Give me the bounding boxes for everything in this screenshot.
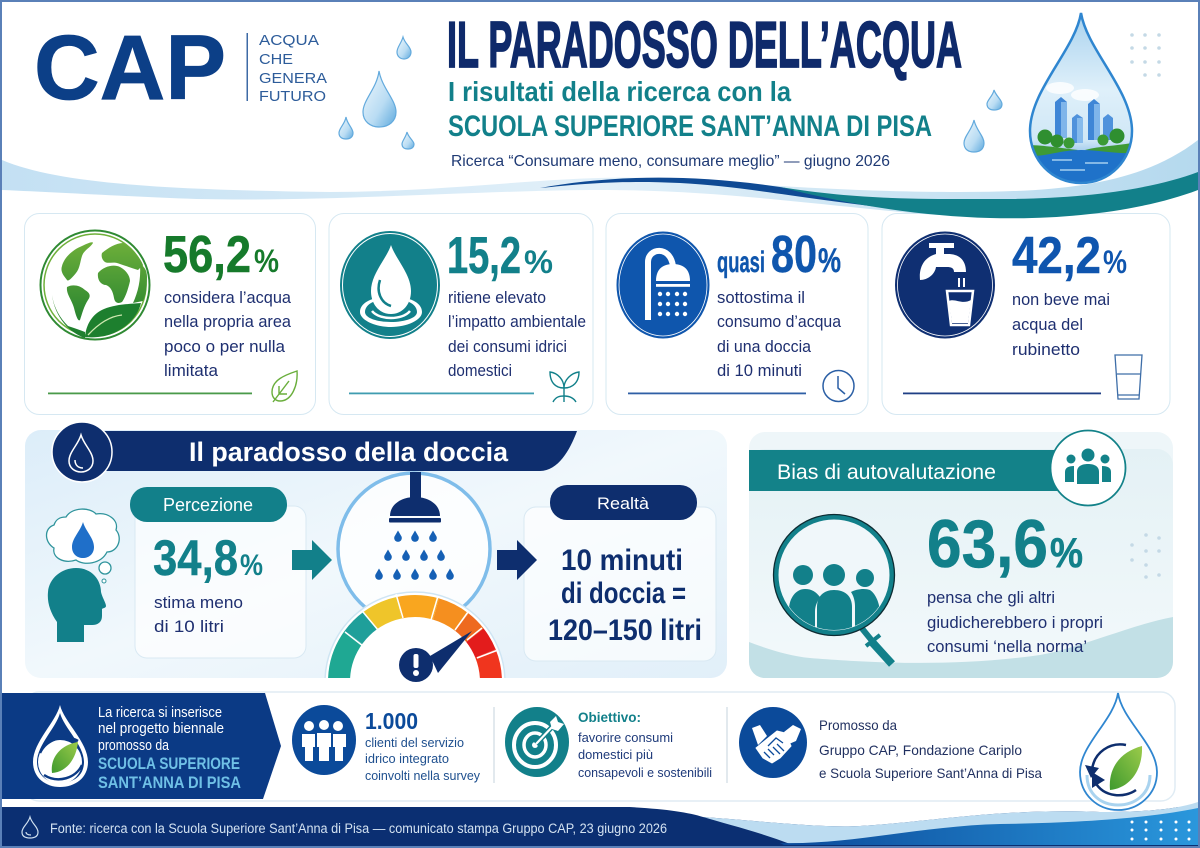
logo: CAP: GENERA bbox=[259, 71, 327, 87]
block: 1.000 clients: idrico integrato bbox=[365, 751, 449, 766]
decorative dots bbox=[1130, 33, 1161, 579]
icon: drop on ripple bbox=[340, 231, 440, 339]
project banner: nel progetto biennale bbox=[98, 721, 224, 737]
stat text: acqua del bbox=[1012, 316, 1083, 334]
stat value: 80 bbox=[771, 226, 817, 284]
icon: big drop with city bbox=[1030, 13, 1132, 185]
block: 1.000 clients bbox=[365, 708, 480, 783]
reality card: Realtà bbox=[597, 494, 650, 513]
block: 1.000 clients: clienti del servizio bbox=[365, 735, 464, 750]
project banner: SANT’ANNA DI PISA bbox=[98, 773, 241, 792]
logo: CAP: ACQUA bbox=[259, 33, 319, 49]
logo: CAP: CHE bbox=[259, 52, 293, 68]
research line: Ricerca “Consumare meno, consumare meglio” — giugno 2026 bbox=[451, 153, 890, 170]
header waves bbox=[2, 140, 1198, 218]
stat value: % bbox=[254, 243, 279, 279]
stat text: consumo d’acqua bbox=[717, 313, 842, 331]
panel: stat 42,2% bbox=[882, 214, 1170, 414]
perception card: % bbox=[240, 549, 263, 582]
icon: drop with leaf bbox=[33, 705, 88, 787]
perception card: Percezione bbox=[163, 495, 253, 515]
icon: target bbox=[505, 707, 569, 777]
stat text: domestici bbox=[448, 362, 512, 380]
icon: handshake bbox=[739, 707, 807, 778]
icon: magnifying glass with people bbox=[774, 514, 894, 664]
icon: tap and glass bbox=[895, 232, 995, 338]
perception card: stima meno bbox=[154, 594, 243, 612]
project strip bbox=[2, 692, 1175, 801]
arrow: shower to reality bbox=[497, 540, 537, 580]
panel: stat 56,2% bbox=[24, 214, 316, 414]
stat value: 63,6 bbox=[927, 506, 1048, 582]
block: obiettivo: favorire consumi bbox=[578, 731, 673, 745]
stat text: consumi ‘nella norma’ bbox=[927, 637, 1087, 656]
stat value: quasi bbox=[717, 246, 765, 279]
block: obiettivo: domestici più bbox=[578, 748, 653, 762]
stat value bbox=[717, 226, 841, 284]
block: 1.000 clients: coinvolti nella survey bbox=[365, 768, 480, 783]
icon: small water drops bbox=[339, 37, 1002, 152]
stat text bbox=[927, 588, 1103, 656]
reality card: 10 minuti bbox=[561, 544, 683, 577]
reality card bbox=[524, 485, 716, 661]
source text: Fonte: ricerca con la Scuola Superiore Sant’Anna di Pisa — comunicato stampa Gruppo CAP, 23 giugno 2026 bbox=[50, 821, 667, 836]
block: promosso da: Promosso da bbox=[819, 717, 897, 733]
arrow: perception to shower bbox=[292, 540, 332, 580]
perception card: 34,8 bbox=[153, 530, 238, 586]
logo: CAP: FUTURO bbox=[259, 89, 326, 105]
stat text bbox=[1012, 291, 1110, 359]
stat text bbox=[717, 289, 842, 380]
block: obiettivo: Obiettivo: bbox=[578, 710, 641, 725]
project banner: promosso da bbox=[98, 738, 170, 754]
block: promosso da bbox=[819, 717, 1042, 781]
stat text: giudicherebbero i propri bbox=[927, 613, 1103, 632]
section banner: Bias di autovalutazione bbox=[777, 461, 996, 484]
icon: sprout bbox=[550, 372, 579, 402]
stat text: pensa che gli altri bbox=[927, 588, 1055, 607]
stat value: % bbox=[1103, 244, 1127, 280]
icon: globe with leaf bbox=[40, 230, 150, 340]
stat value: % bbox=[1050, 529, 1083, 576]
icon: clock bbox=[823, 370, 854, 402]
section banner: Il paradosso della doccia bbox=[189, 437, 509, 467]
icon: head with thought cloud bbox=[46, 509, 119, 642]
block: 1.000 clients: 1.000 bbox=[365, 708, 418, 734]
section banner bbox=[52, 422, 577, 482]
stat value: 42,2 bbox=[1012, 227, 1101, 285]
panel: il paradosso della doccia bbox=[25, 422, 727, 682]
project banner: SCUOLA SUPERIORE bbox=[98, 754, 240, 773]
stat text: l’impatto ambientale bbox=[448, 313, 586, 331]
block: promosso da: e Scuola Superiore Sant’Anna di Pisa bbox=[819, 765, 1042, 781]
section banner bbox=[749, 430, 1126, 506]
stat text bbox=[164, 289, 292, 380]
block: obiettivo bbox=[578, 710, 712, 780]
stat text: limitata bbox=[164, 362, 219, 380]
stat text: poco o per nulla bbox=[164, 338, 286, 356]
icon: drop with leaf and cycle arrows bbox=[1080, 693, 1157, 810]
stat text: dei consumi idrici bbox=[448, 338, 567, 356]
stat text: considera l’acqua bbox=[164, 289, 292, 307]
stat value: 15,2 bbox=[447, 227, 521, 285]
logo: CAP bbox=[34, 17, 327, 119]
panel: stat quasi 80% bbox=[606, 214, 868, 414]
project banner: La ricerca si inserisce bbox=[98, 705, 222, 721]
footer band bbox=[2, 802, 1198, 848]
subtitle bbox=[448, 76, 932, 143]
stat text: non beve mai bbox=[1012, 291, 1110, 309]
reality card: di doccia = bbox=[561, 577, 686, 610]
stat text: di 10 minuti bbox=[717, 362, 802, 380]
stat text: ritiene elevato bbox=[448, 289, 546, 307]
subtitle: SCUOLA SUPERIORE SANT’ANNA DI PISA bbox=[448, 110, 932, 143]
icon: glass bbox=[1115, 355, 1142, 399]
reality card: 120–150 litri bbox=[548, 614, 702, 647]
perception card bbox=[130, 487, 306, 658]
stat text: di una doccia bbox=[717, 338, 812, 356]
block: promosso da: Gruppo CAP, Fondazione Cariplo bbox=[819, 742, 1022, 758]
panel: stat 15,2% bbox=[329, 214, 593, 414]
icon: footer drop bbox=[22, 817, 38, 838]
decorative wave bbox=[749, 617, 1173, 678]
decorative footer dots bbox=[1130, 820, 1190, 840]
icon: shower circle bbox=[338, 472, 490, 625]
gauge needle and warning bbox=[399, 631, 472, 682]
stat value: 56,2 bbox=[163, 226, 251, 284]
subtitle: I risultati della ricerca con la bbox=[448, 76, 791, 107]
perception card: di 10 litri bbox=[154, 618, 224, 636]
stat text: rubinetto bbox=[1012, 341, 1080, 359]
gauge bbox=[325, 592, 505, 682]
stat value: % bbox=[818, 242, 841, 280]
icon: leaf bbox=[272, 371, 297, 402]
icon: shower bbox=[616, 232, 710, 338]
stat text bbox=[448, 289, 586, 380]
panel: bias di autovalutazione bbox=[749, 430, 1173, 678]
icon: people circle bbox=[292, 705, 356, 775]
project banner bbox=[2, 693, 281, 799]
logo: CAP: CAP bbox=[34, 17, 226, 119]
stat text: nella propria area bbox=[164, 313, 292, 331]
stat text: sottostima il bbox=[717, 289, 805, 307]
stat value: % bbox=[524, 244, 553, 280]
block: obiettivo: consapevoli e sostenibili bbox=[578, 766, 712, 780]
